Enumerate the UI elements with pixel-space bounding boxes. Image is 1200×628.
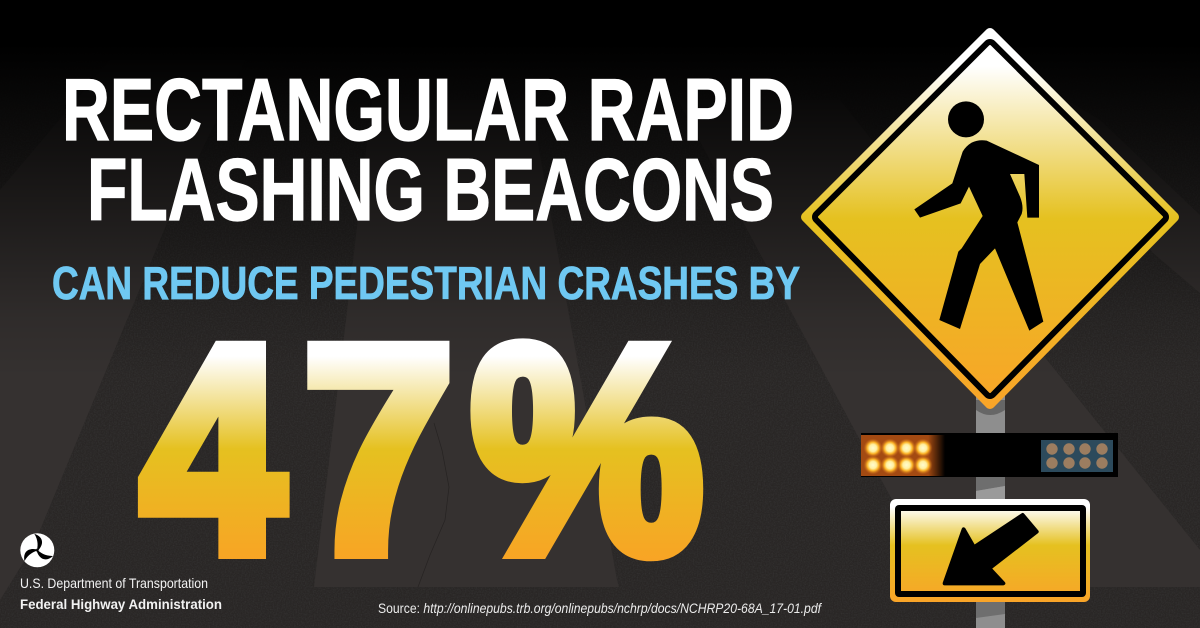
agency text xyxy=(20,575,222,612)
logo: USDOT tri-swirl emblem xyxy=(20,533,54,567)
big statistic: 47%: 7 xyxy=(303,286,454,614)
subheading: CAN REDUCE PEDESTRIAN CRASHES BY xyxy=(52,257,800,309)
beacon: right lights off xyxy=(1041,440,1113,472)
title: FLASHING BEACONS xyxy=(87,140,774,239)
signpost xyxy=(976,395,1005,628)
icon: diagonal arrow sign xyxy=(890,499,1090,602)
title: RECTANGULAR RAPID xyxy=(62,60,794,159)
title xyxy=(62,60,794,239)
rectangular rapid flashing beacon bar xyxy=(861,433,1118,477)
agency text: U.S. Department of Transportation xyxy=(20,575,208,591)
icon: pedestrian crossing warning sign xyxy=(806,33,1174,404)
big statistic: 47% xyxy=(141,286,703,614)
icon: pedestrian figure xyxy=(914,101,1043,331)
source citation: Source: http://onlinepubs.trb.org/onlinepubs/nchrp/docs/NCHRP20-68A_17-01.pdf xyxy=(378,601,822,616)
agency text: Federal Highway Administration xyxy=(20,597,222,612)
big statistic: 47%: % xyxy=(471,286,703,614)
big statistic: 47%: 4 xyxy=(141,286,286,614)
icon: arrow pointing down-left xyxy=(945,515,1037,583)
beacon: left lights flashing xyxy=(861,435,945,476)
